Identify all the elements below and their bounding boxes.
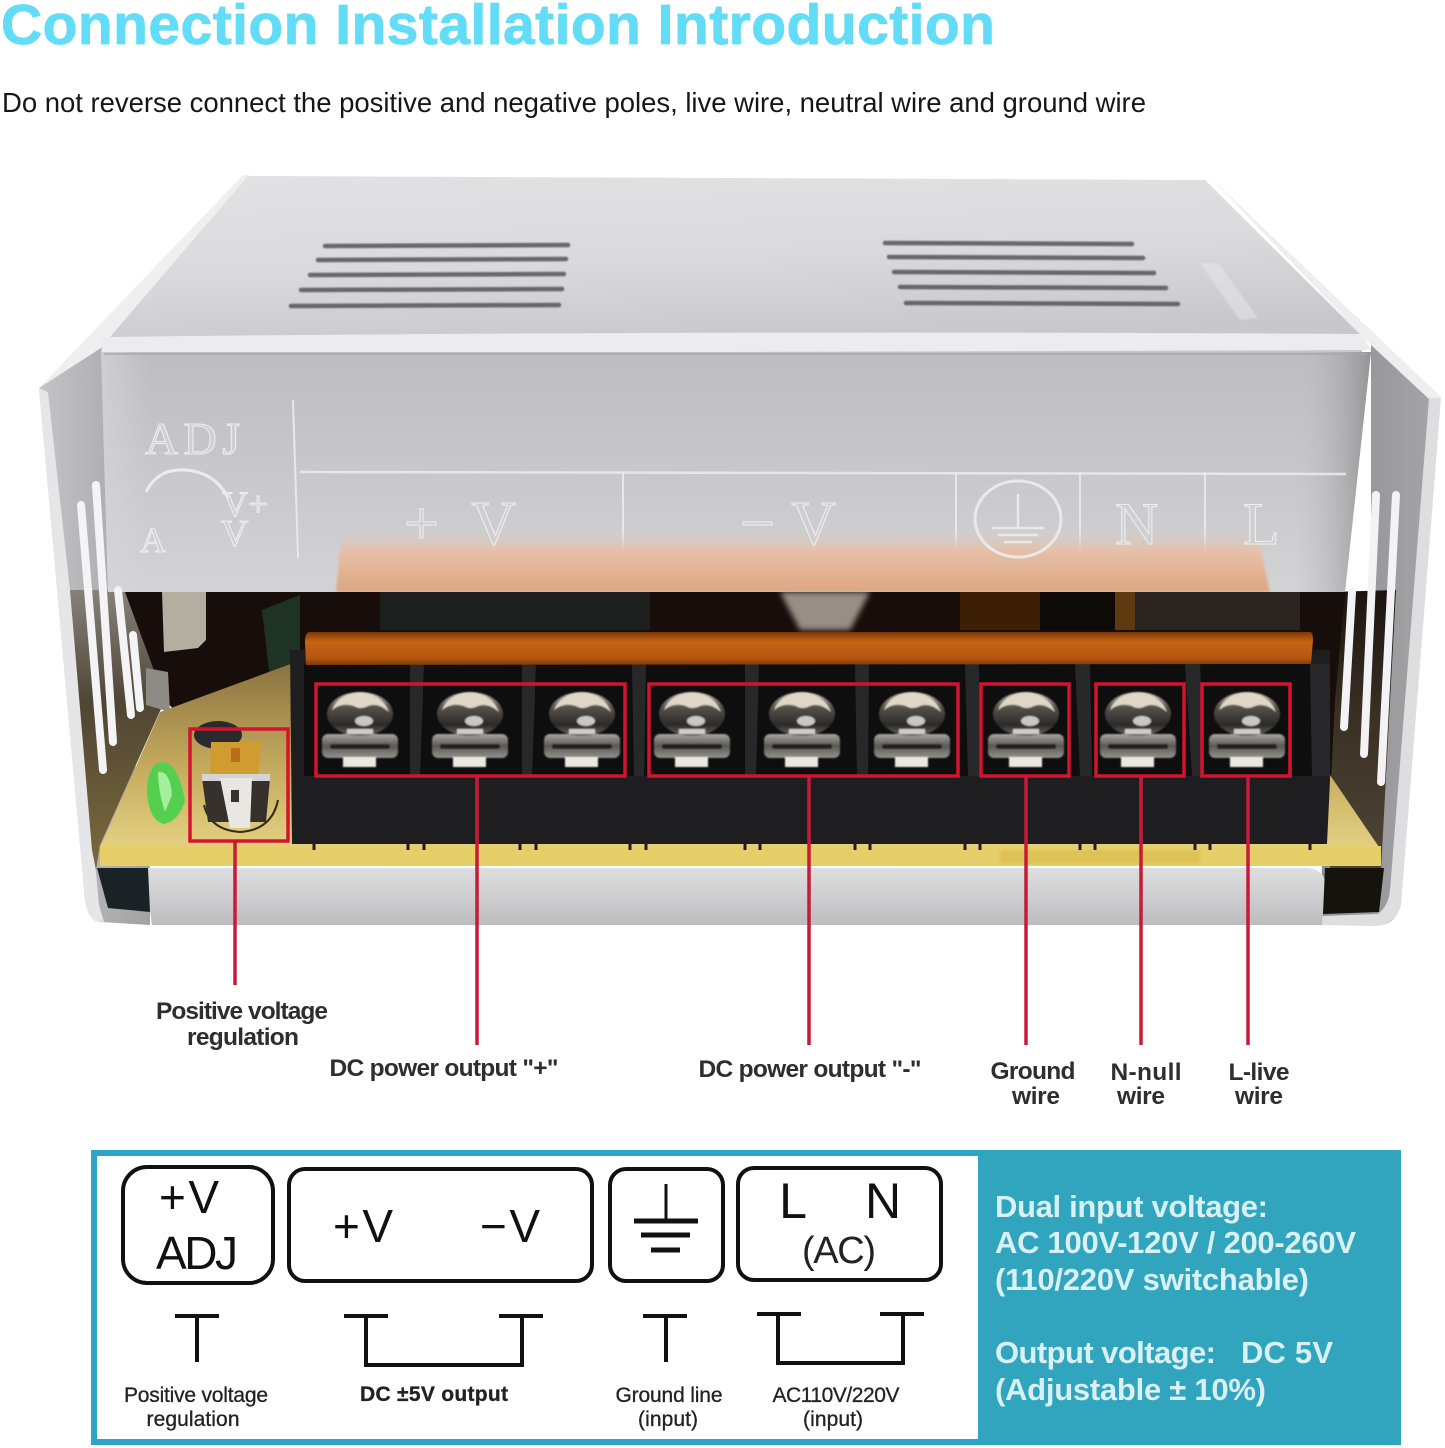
input voltage text xyxy=(995,1189,1356,1297)
embossed panel markings: L xyxy=(1243,491,1280,557)
label: dc output minus: DC power output "-" xyxy=(698,1056,922,1083)
side vents right xyxy=(1344,495,1396,782)
embossed panel markings: N xyxy=(1115,491,1158,557)
label: n-null wire: N-null xyxy=(1110,1059,1182,1086)
red highlight boxes xyxy=(190,684,1290,841)
label: l-live wire: L-live xyxy=(1228,1059,1290,1086)
input voltage text: AC 100V-120V / 200-260V xyxy=(995,1225,1356,1260)
legend labels xyxy=(124,1383,900,1431)
label: l-live wire second line: wire xyxy=(1234,1083,1283,1110)
bracket connector: DC output xyxy=(344,1316,543,1365)
symbol box: L N AC: N xyxy=(865,1173,901,1229)
adjustment potentiometer xyxy=(194,721,278,832)
front panel xyxy=(101,352,1371,592)
embossed panel markings: − V xyxy=(740,490,836,558)
output voltage text: Output voltage: xyxy=(995,1335,1216,1370)
terminal base notches xyxy=(314,842,1310,850)
terminal screws xyxy=(322,692,1285,767)
callout labels xyxy=(156,998,1290,1110)
symbol box: ground xyxy=(610,1169,723,1281)
legend labels: (input) xyxy=(638,1408,698,1431)
green led xyxy=(147,762,185,824)
right side wing xyxy=(1213,180,1441,926)
orange terminal cover strip xyxy=(305,632,1313,665)
symbol box: L N AC: (AC) xyxy=(802,1230,876,1272)
red leader lines xyxy=(235,776,1248,1045)
interior dark cavity xyxy=(125,592,1345,850)
vent slots right xyxy=(885,243,1178,304)
embossed panel markings xyxy=(140,413,1280,560)
label: n-null wire second line: wire xyxy=(1116,1083,1165,1110)
embossed panel markings: ADJ xyxy=(145,413,240,464)
pcb board xyxy=(100,662,1381,866)
symbol box: L N AC xyxy=(738,1168,941,1280)
symbol box: +V -V: +V xyxy=(333,1200,393,1252)
legend labels: Ground line xyxy=(616,1384,722,1407)
label: positive voltage regulation second line: regulation xyxy=(187,1024,299,1051)
T connector: positive voltage xyxy=(175,1316,219,1362)
legend labels: AC110V/220V xyxy=(772,1384,900,1407)
terminal block body xyxy=(290,650,1330,844)
teal specification panel xyxy=(978,1150,1401,1445)
inner component heat sink xyxy=(162,592,206,652)
symbol box: +V ADJ xyxy=(123,1167,273,1283)
symbol box: +V -V xyxy=(289,1169,592,1281)
label: positive voltage regulation: Positive voltage xyxy=(156,998,328,1025)
side vents left xyxy=(81,485,140,770)
top cover xyxy=(104,176,1362,352)
legend labels: regulation xyxy=(146,1408,240,1431)
symbol box: +V ADJ: ADJ xyxy=(156,1227,238,1279)
symbol box: L N AC: L xyxy=(779,1173,807,1229)
label: ground wire: Ground xyxy=(990,1058,1076,1085)
label: ground wire second line: wire xyxy=(1011,1083,1060,1110)
bottom metal plate xyxy=(148,868,1325,925)
embossed ground symbol xyxy=(975,481,1061,557)
output voltage text: (Adjustable ± 10%) xyxy=(995,1372,1266,1407)
symbol box: +V ADJ: +V xyxy=(159,1171,219,1223)
power supply photo illustration xyxy=(39,175,1441,926)
embossed lid mark xyxy=(1200,263,1258,320)
input voltage text: Dual input voltage: xyxy=(995,1189,1268,1224)
wiring legend panel xyxy=(94,1150,1401,1445)
label: dc output plus: DC power output "+" xyxy=(330,1055,558,1082)
input voltage text: (110/220V switchable) xyxy=(995,1262,1309,1297)
symbol box: +V -V: −V xyxy=(480,1200,540,1252)
legend labels: (input) xyxy=(803,1408,863,1431)
left side wing xyxy=(39,175,250,925)
subtitle warning text: Do not reverse connect the positive and negative poles, live wire, neutral wire and ground wire xyxy=(2,87,1146,118)
legend labels: DC ±5V output xyxy=(360,1383,508,1406)
output voltage text xyxy=(995,1335,1333,1407)
embossed panel markings: A xyxy=(140,520,166,560)
embossed panel markings: V xyxy=(221,513,249,555)
legend labels: Positive voltage xyxy=(124,1384,268,1407)
peach reflection of terminal strip xyxy=(336,530,1270,592)
embossed panel markings: V+ xyxy=(222,484,268,524)
vent slots left xyxy=(291,245,568,306)
embossed panel markings: + V xyxy=(404,490,516,558)
output voltage text: DC 5V xyxy=(1241,1335,1333,1370)
T connector: ground xyxy=(643,1316,687,1362)
bracket connector: AC input xyxy=(757,1314,924,1363)
